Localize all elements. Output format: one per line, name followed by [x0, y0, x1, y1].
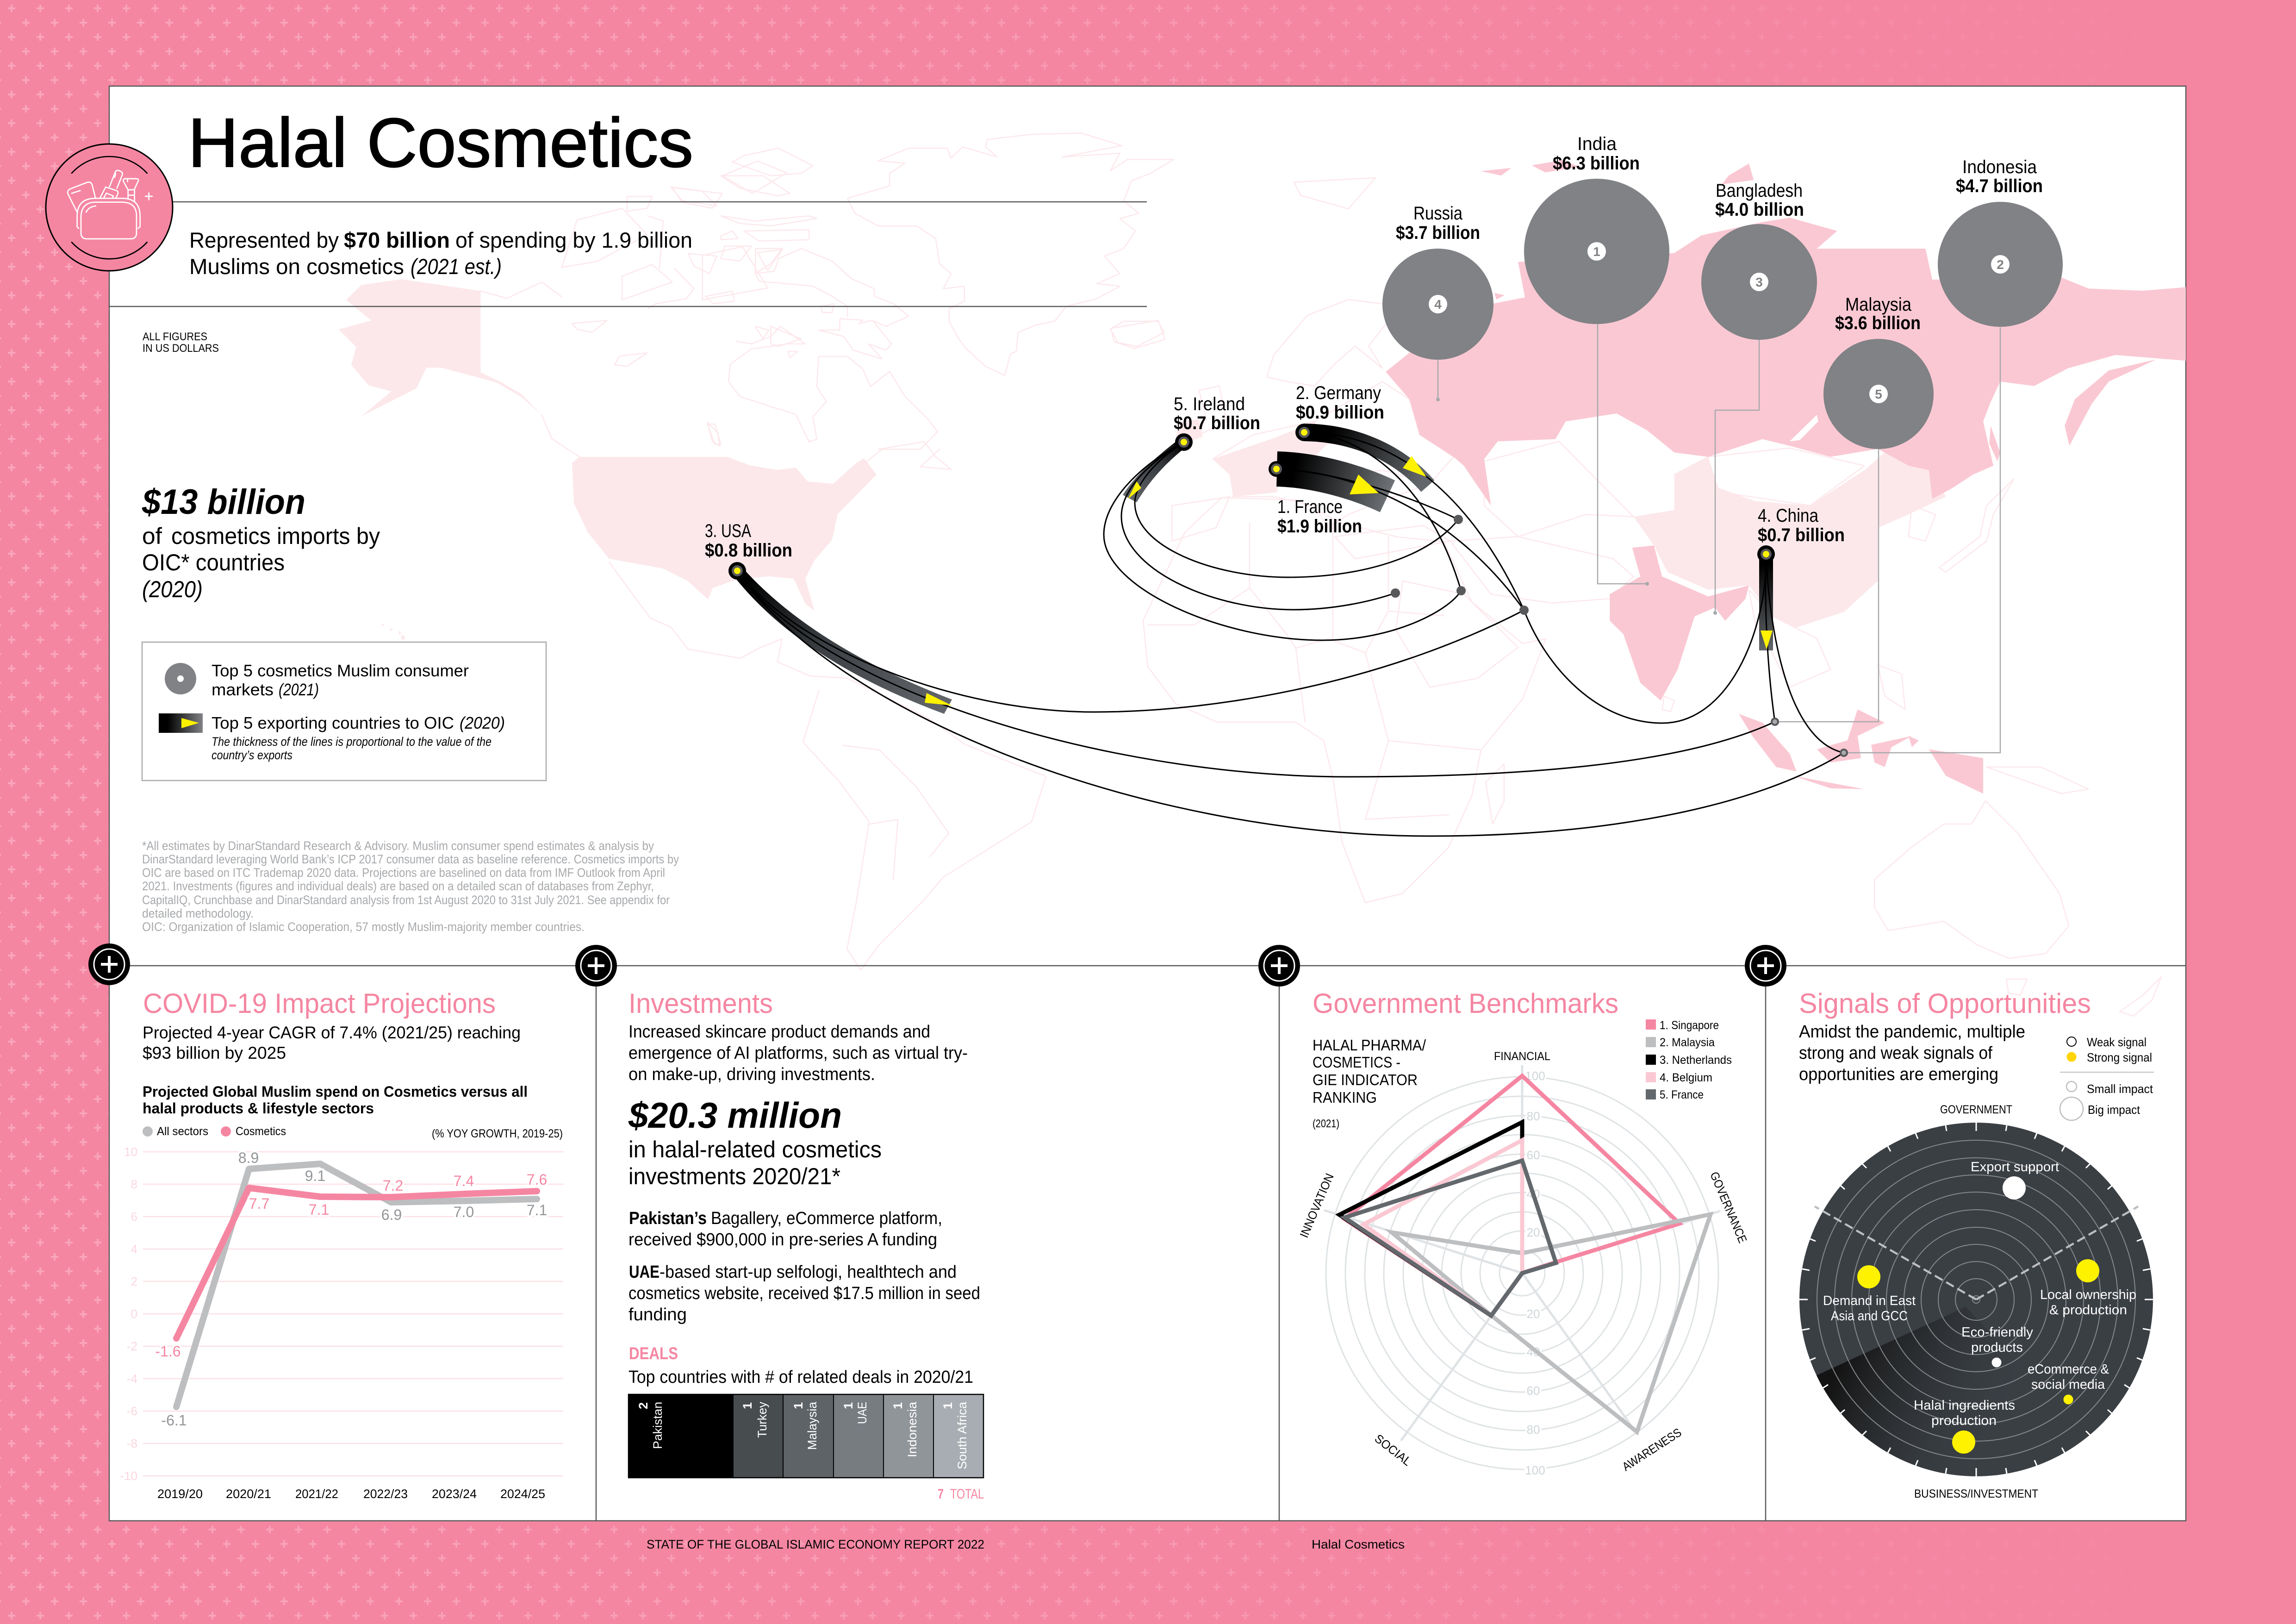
legend: radar chart: 3. Netherlands — [1660, 1054, 1732, 1067]
radar chart: INNOVATION — [1297, 1171, 1337, 1240]
line chart: 8.9 — [238, 1149, 259, 1166]
signals radar — [1777, 1123, 2175, 1528]
legend: export ribbon — [159, 713, 203, 733]
exporter labels: 2. Germany — [1296, 383, 1381, 403]
line chart: -1.6 — [155, 1343, 181, 1360]
line chart: 2024/25 — [500, 1487, 545, 1501]
line chart: 2020/21 — [226, 1487, 271, 1501]
legend: export text: country’s exports — [212, 748, 292, 762]
text: signals intro: opportunities are emerging — [1799, 1065, 1998, 1084]
heading: government benchmarks: Government Benchmarks — [1313, 988, 1618, 1019]
map: Russia, India, Indonesia, Malaysia highlight — [1386, 160, 2197, 793]
map: Americas, Africa, Australia outlines — [609, 498, 2161, 1016]
radar chart: 100 — [1525, 1463, 1545, 1477]
key stat: investments: investments 2020/21* — [628, 1163, 840, 1189]
line chart: 6 — [131, 1210, 137, 1224]
subtitle: Represented by — [189, 228, 339, 252]
line chart: 2023/24 — [432, 1487, 477, 1501]
radar chart: 20 — [1527, 1307, 1540, 1321]
key stat: imports: cosmetics imports by — [171, 523, 380, 549]
radar chart: 80 — [1527, 1423, 1540, 1437]
consumer market: Malaysia: Malaysia — [1845, 294, 1912, 315]
legend: consumer market text — [212, 661, 469, 699]
radar chart: 80 — [1527, 1109, 1540, 1123]
radar chart: 40 — [1527, 1187, 1540, 1201]
text: Pakistan deal: received $900,000 in pre-series A funding — [628, 1230, 937, 1249]
line chart: 0 — [131, 1307, 137, 1321]
text: investments intro: Increased skincare product demands and — [628, 1022, 930, 1042]
line chart: -8 — [127, 1437, 137, 1450]
text: deals total: 7 — [938, 1487, 944, 1502]
world map — [339, 133, 2197, 1016]
heading: COVID-19: COVID-19 Impact Projections — [143, 988, 496, 1019]
key stat: imports: (2020) — [142, 576, 203, 602]
text: UAE deal: -based start-up selfologi, healthtech and — [660, 1262, 957, 1282]
consumer market: Indonesia: Indonesia — [1962, 157, 2037, 177]
radar chart: 60 — [1527, 1384, 1540, 1398]
line chart: 7.4 — [454, 1173, 474, 1189]
legend: radar chart — [1646, 1019, 1732, 1101]
text: radar chart title: RANKING — [1313, 1089, 1377, 1106]
radar chart: 100 — [1525, 1069, 1545, 1083]
key stat: investments: $20.3 million — [628, 1095, 842, 1136]
legend: export text — [212, 713, 505, 762]
text: radar chart title: GIE INDICATOR — [1313, 1071, 1418, 1088]
line chart: 4 — [131, 1242, 137, 1256]
chart: deals stacked bar: Malaysia — [805, 1401, 819, 1450]
footnote: OIC: Organization of Islamic Cooperation, 57 mostly Muslim-majority member countries. — [142, 920, 585, 934]
signal: demand in East Asia and GCC: Asia and GCC — [1831, 1309, 1908, 1324]
footnote: OIC are based on ITC Trademap 2020 data. Projections are baselined on data from IMF Outlook from April — [142, 866, 665, 880]
footnote: detailed methodology. — [142, 906, 254, 920]
legend: export text: The thickness of the lines is proportional to the value of the — [212, 735, 492, 749]
legend: signals: Strong signal — [2087, 1050, 2152, 1064]
signal: local ownership — [2040, 1259, 2136, 1318]
line chart — [120, 1145, 563, 1501]
line chart: -6.1 — [161, 1412, 187, 1429]
text: Pakistan deal: Pakistan’s — [629, 1209, 707, 1228]
text: radar axis labels: BUSINESS/INVESTMENT — [1914, 1487, 2038, 1500]
text: deals total — [938, 1487, 984, 1502]
legend: consumer market text: (2021) — [279, 680, 319, 699]
key stat: imports: of — [142, 523, 162, 549]
export head: France — [1269, 461, 1379, 494]
export head: Ireland — [1128, 433, 1193, 499]
signal: eco-friendly products — [1961, 1325, 2033, 1368]
icon: plus button 4 — [1745, 945, 1786, 987]
panel: government benchmarks — [1297, 988, 1750, 1477]
signal: local ownership: & production — [2049, 1303, 2127, 1318]
radar chart: SOCIAL — [1372, 1431, 1414, 1468]
line chart: 7.1 — [309, 1201, 329, 1218]
footer — [647, 1537, 1405, 1551]
text: radar chart title: HALAL PHARMA/ — [1313, 1037, 1426, 1054]
text: deals heading: Top countries with # of related deals in 2020/21 — [628, 1368, 973, 1387]
consumer market: Malaysia — [1823, 294, 1934, 449]
ribbon body: USA — [732, 568, 952, 714]
consumer market: Russia — [1382, 203, 1493, 360]
exporter labels: $0.7 billion — [1174, 413, 1260, 433]
exporter labels: 5. Ireland — [1174, 394, 1245, 414]
consumer market: Indonesia — [1938, 157, 2063, 327]
line chart: 9.1 — [305, 1168, 325, 1184]
consumer market: Indonesia: $4.7 billion — [1956, 176, 2043, 196]
flow end points — [1391, 515, 1847, 756]
radar chart: 20 — [1527, 1225, 1540, 1239]
map: Hawaii — [382, 624, 405, 640]
text: COVID-19 summary: Projected 4-year CAGR of 7.4% (2021/25) reaching — [143, 1023, 521, 1042]
ribbon body: Germany — [1304, 432, 1428, 486]
export head: China — [1757, 545, 1775, 650]
exporter labels: 1. France — [1277, 497, 1343, 517]
text: investments intro: emergence of AI platforms, such as virtual try- — [628, 1043, 968, 1063]
key stat: investments: in halal-related cosmetics — [628, 1137, 882, 1162]
chart: deals stacked bar: 1 — [791, 1402, 805, 1409]
footnote: DinarStandard leveraging World Bank’s ICP 2017 consumer data as baseline reference. Cosmetics imports by — [142, 852, 679, 866]
exporter labels: $0.8 billion — [705, 540, 792, 561]
consumer market: Indonesia: 2 — [1997, 257, 2004, 272]
text: chart unit: (% YOY GROWTH, 2019-25) — [432, 1127, 563, 1140]
chart: deals stacked bar: 2 — [636, 1402, 650, 1409]
exporter labels: $0.7 billion — [1758, 525, 1845, 545]
panel: investments — [628, 988, 984, 1502]
text: radar axis labels: GOVERNMENT — [1940, 1103, 2012, 1116]
heading: signals of opportunities: Signals of Opportunities — [1799, 988, 2091, 1019]
signal: eco-friendly products: products — [1971, 1340, 2023, 1355]
text: deals heading: DEALS — [629, 1344, 678, 1363]
signal: demand in East Asia and GCC — [1823, 1265, 1916, 1324]
radar chart: FINANCIAL — [1494, 1050, 1550, 1063]
exporter labels: 4. China — [1758, 506, 1819, 526]
signal: halal ingredients: production — [1931, 1413, 1997, 1428]
ribbon body: Ireland — [1123, 438, 1188, 502]
map: France Germany Ireland highlight — [1175, 419, 1328, 497]
key stat: imports — [142, 482, 380, 602]
consumer market: Bangladesh: $4.0 billion — [1715, 200, 1804, 220]
text: COVID-19 summary: $93 billion by 2025 — [143, 1043, 286, 1062]
text: investments intro — [628, 1022, 968, 1084]
legend: export text: Top 5 exporting countries to OIC — [212, 713, 454, 732]
legend: radar chart: 1. Singapore — [1660, 1019, 1719, 1032]
legend: consumer market circle — [165, 663, 196, 694]
signal: halal ingredients — [1914, 1398, 2015, 1454]
subtitle: (2021 est.) — [411, 254, 502, 279]
consumer market: Russia: Russia — [1413, 203, 1463, 224]
line chart: 2019/20 — [157, 1487, 203, 1501]
text: signals intro — [1799, 1022, 2025, 1084]
legend: consumer market text: Top 5 cosmetics Muslim consumer — [212, 661, 469, 680]
footnote: 2021. Investments (figures and individual deals) are based on a detailed scan of databases from Zephyr, — [142, 879, 654, 893]
line chart: 10 — [124, 1145, 137, 1159]
map: USA highlight — [572, 457, 877, 611]
legend: export text: (2020) — [460, 713, 505, 732]
radar chart: 40 — [1527, 1345, 1540, 1359]
subtitle: of spending by 1.9 billion — [455, 228, 692, 252]
exporter labels: $1.9 billion — [1277, 516, 1362, 537]
text: Pakistan deal: Bagallery, eCommerce platform, — [711, 1209, 942, 1228]
text: deals total: TOTAL — [950, 1487, 984, 1502]
text: radar chart title: (2021) — [1313, 1118, 1339, 1130]
consumer market: India: India — [1577, 134, 1617, 154]
legend: signals: Small impact — [2087, 1082, 2153, 1096]
consumer market: Russia: 4 — [1434, 297, 1442, 312]
legend: chart: Cosmetics — [236, 1125, 286, 1138]
legend: chart — [143, 1125, 286, 1138]
icon: plus button 2 — [575, 945, 617, 987]
consumer market: Bangladesh: Bangladesh — [1716, 181, 1803, 201]
signal: halal ingredients: Halal ingredients — [1914, 1398, 2015, 1413]
text: signals intro: strong and weak signals of — [1799, 1043, 1992, 1063]
line chart: 2021/22 — [295, 1487, 338, 1501]
signal: eCommerce and social media: social media — [2031, 1377, 2105, 1392]
legend: signals — [2060, 1035, 2154, 1120]
main white panel — [109, 86, 2186, 1521]
footer: Halal Cosmetics — [1312, 1537, 1405, 1551]
text: radar axis labels — [1914, 1103, 2038, 1500]
consumer market: Malaysia: $3.6 billion — [1835, 313, 1921, 333]
header divider lines — [109, 202, 1147, 306]
text: signals intro: Amidst the pandemic, multiple — [1799, 1022, 2025, 1042]
line chart: 7.0 — [454, 1204, 474, 1220]
heading: investments: Investments — [628, 988, 773, 1019]
chart: deals stacked bar: Indonesia — [905, 1401, 919, 1457]
text: radar chart title: COSMETICS - — [1313, 1054, 1400, 1071]
signal: export support — [1971, 1160, 2059, 1199]
footer: STATE OF THE GLOBAL ISLAMIC ECONOMY REPORT 2022 — [647, 1537, 984, 1551]
exporter labels: 3. USA — [705, 521, 751, 541]
icon: plus button 1 — [88, 943, 130, 985]
chart: deals stacked bar: Turkey — [755, 1402, 769, 1438]
subtitle — [189, 228, 692, 279]
ribbon body: France — [1277, 469, 1388, 496]
consumer market: Bangladesh: 3 — [1755, 275, 1763, 289]
signal: eco-friendly products: Eco-friendly — [1961, 1325, 2033, 1340]
text: chart title: halal products & lifestyle sectors — [143, 1100, 374, 1117]
consumer market: Bangladesh — [1701, 181, 1817, 340]
line chart: -10 — [120, 1469, 137, 1483]
legend box — [142, 642, 546, 781]
export flow lines — [737, 432, 1844, 836]
legend: chart: All sectors — [157, 1125, 208, 1138]
note: currency: IN US DOLLARS — [143, 342, 219, 355]
radar chart: 60 — [1527, 1148, 1540, 1162]
legend: radar chart: 5. France — [1660, 1088, 1704, 1101]
line chart: 8 — [131, 1177, 137, 1191]
legend: radar chart: 2. Malaysia — [1660, 1036, 1715, 1049]
chart: deals stacked bar — [628, 1394, 983, 1478]
export head: USA — [728, 562, 952, 706]
radar chart: AWARENESS — [1620, 1425, 1684, 1474]
icon: cosmetics bag badge — [46, 144, 173, 271]
export head: Germany — [1295, 424, 1426, 477]
chart: deals stacked bar: 1 — [841, 1402, 855, 1409]
chart: deals stacked bar: 1 — [891, 1402, 905, 1409]
line chart: 7.7 — [249, 1195, 269, 1212]
footnote: CapitalIQ, Crunchbase and DinarStandard analysis from 1st August 2020 to 31st July 2021. See appendix for — [142, 893, 670, 907]
legend: consumer market text: markets — [212, 680, 274, 699]
panel: signals of opportunities — [1799, 993, 2154, 1498]
panel: COVID-19 impact projections — [120, 988, 563, 1501]
connector lines: consumer markets — [1436, 324, 2000, 753]
map: Eurasia outlines — [1111, 178, 2088, 793]
line chart: 7.2 — [383, 1177, 403, 1194]
chart: deals stacked bar: 1 — [941, 1402, 955, 1409]
line chart: -2 — [127, 1339, 137, 1353]
chart: deals stacked bar: Pakistan — [651, 1402, 665, 1449]
note: currency — [143, 331, 219, 355]
consumer market: India — [1524, 134, 1669, 324]
text: UAE deal: funding — [628, 1305, 687, 1324]
map: China highlight — [1634, 452, 1946, 627]
exporter labels: $0.9 billion — [1296, 402, 1384, 423]
line chart: 7.6 — [527, 1171, 547, 1188]
title: Halal Cosmetics — [188, 104, 693, 181]
line chart: -6 — [127, 1404, 137, 1418]
text: UAE deal: UAE — [629, 1262, 660, 1282]
text: chart title — [143, 1083, 528, 1117]
line chart: 7.1 — [527, 1202, 547, 1218]
footnote — [142, 839, 679, 934]
exporter labels — [705, 383, 1845, 561]
text: deals heading — [628, 1344, 973, 1387]
ribbon body: China — [1759, 554, 1773, 650]
text: Pakistan deal — [628, 1209, 942, 1249]
subtitle: $70 billion — [344, 228, 450, 252]
consumer market: India: $6.3 billion — [1553, 153, 1640, 174]
consumer market: Russia: $3.7 billion — [1396, 223, 1480, 243]
map: Arctic Canada and Greenland outlines — [648, 133, 1174, 469]
chart: deals stacked bar: South Africa — [955, 1401, 969, 1469]
note: currency: ALL FIGURES — [143, 331, 207, 343]
chart: deals stacked bar: 1 — [740, 1402, 754, 1409]
text: chart title: Projected Global Muslim spend on Cosmetics versus all — [143, 1083, 528, 1100]
text: UAE deal — [628, 1262, 980, 1324]
section dividers — [109, 966, 2186, 1521]
signal: eCommerce and social media: eCommerce & — [2028, 1362, 2109, 1377]
radar chart: GOVERNANCE — [1707, 1170, 1750, 1245]
line chart: 2 — [131, 1274, 137, 1288]
key stat: investments — [628, 1095, 882, 1189]
signal: local ownership: Local ownership — [2040, 1287, 2136, 1302]
signal: eCommerce and social media — [2028, 1362, 2109, 1405]
subtitle: Muslims on cosmetics — [189, 254, 404, 279]
consumer market: Malaysia: 5 — [1875, 387, 1882, 401]
text: radar chart title — [1313, 1037, 1426, 1130]
legend: signals: Big impact — [2088, 1103, 2140, 1117]
key stat: imports: OIC* countries — [142, 550, 285, 575]
consumer market: India: 1 — [1593, 244, 1600, 259]
legend: signals: Weak signal — [2087, 1035, 2147, 1049]
footnote: *All estimates by DinarStandard Research & Advisory. Muslim consumer spend estimates & analysis by — [142, 839, 654, 853]
legend: radar chart: 4. Belgium — [1660, 1071, 1712, 1084]
export ribbons — [732, 432, 1766, 714]
signal: demand in East Asia and GCC: Demand in East — [1823, 1293, 1916, 1308]
text: COVID-19 summary — [143, 1023, 521, 1062]
map: Alaska and Canada west — [339, 161, 787, 457]
line chart: -4 — [127, 1372, 137, 1386]
text: UAE deal: cosmetics website, received $17.5 million in seed — [628, 1284, 980, 1303]
radar chart — [1297, 1050, 1750, 1477]
line chart: 6.9 — [381, 1206, 402, 1223]
text: investments intro: on make-up, driving investments. — [628, 1065, 875, 1084]
line chart: 2022/23 — [363, 1487, 408, 1501]
key stat: imports: $13 billion — [142, 482, 305, 522]
icon: plus button 3 — [1258, 945, 1300, 987]
chart: deals stacked bar: UAE — [855, 1402, 869, 1424]
signal: export support: Export support — [1971, 1160, 2059, 1174]
